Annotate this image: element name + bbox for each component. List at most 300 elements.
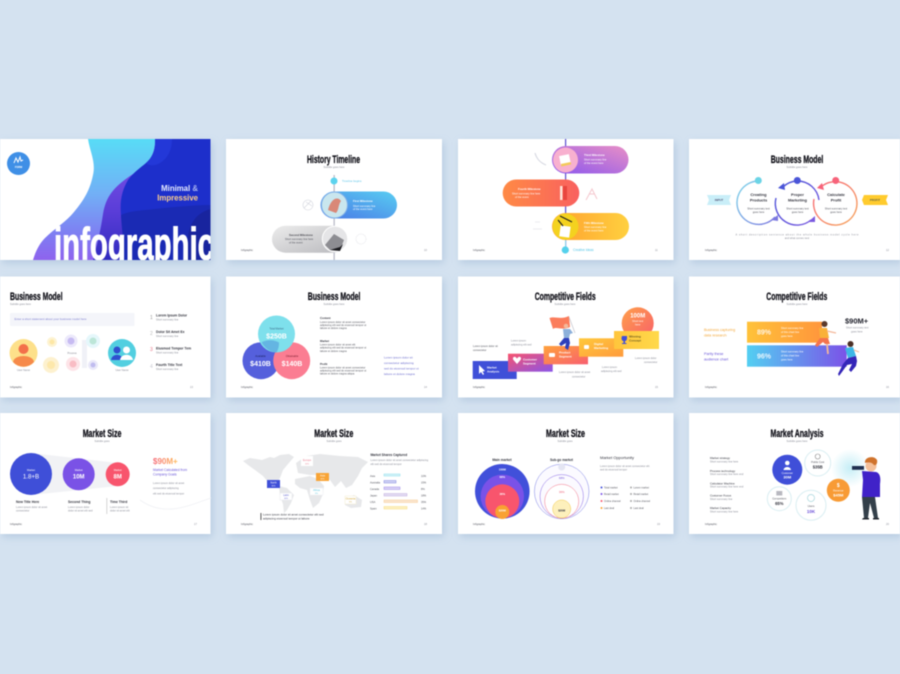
list: items: 4	[150, 364, 153, 370]
venn diagram: Total Market	[269, 326, 284, 330]
circle: 100M: Short text	[632, 319, 644, 323]
coral pill	[503, 180, 579, 206]
list: Calculator Machine	[710, 482, 735, 486]
map pin: blue	[267, 480, 280, 488]
coral pill: Short summary line here	[512, 192, 541, 196]
icon: user yellow	[10, 339, 38, 367]
bar chart: shares: 15%	[421, 480, 427, 484]
yellow pill: Fifth Milestone	[584, 221, 604, 225]
venn diagram: $140B	[282, 361, 302, 368]
coral pill: of the event	[515, 195, 529, 199]
text block: two: Market	[320, 339, 329, 343]
banner: Enter a short statement about your business model here	[14, 317, 87, 321]
list: items: 1	[150, 315, 153, 321]
step: four: Marketing	[594, 346, 608, 350]
text block: three: labore et dolore magna aliqua	[320, 372, 355, 376]
cycle: calculate profit: Calculate	[827, 192, 846, 197]
bar: 89%: goes here	[781, 334, 793, 338]
slide: competitive fields bars	[689, 276, 900, 398]
icon: phone sketch	[535, 153, 546, 165]
nested chart: main market: 68%	[499, 475, 506, 479]
caption: and what comes next	[785, 236, 810, 240]
map pin: blue: 30%	[271, 486, 276, 488]
nested chart: outline market: 36%	[559, 490, 565, 494]
grey pill: of the event	[289, 240, 303, 244]
input ribbon	[707, 195, 731, 205]
bar: 96%	[747, 345, 847, 367]
list: Process technology	[710, 469, 736, 473]
nested chart: main market: $20M	[499, 508, 506, 512]
map pin: pink: 10%	[305, 464, 309, 466]
labels around steps: Lorem ipsum	[511, 338, 526, 342]
bar chart: shares: USA	[370, 500, 376, 504]
subtitle: Subtitle goes here	[10, 302, 31, 306]
subtitle: Subtitle goes here	[787, 302, 808, 306]
cover heading: Impressive	[157, 194, 199, 202]
nested chart: main market: 100M	[499, 468, 506, 472]
legend	[600, 486, 651, 510]
market share heading: Lorem ipsum dolor sit amet consectetur adipiscing	[370, 458, 429, 462]
title: Market Size	[83, 428, 121, 440]
yellow pill	[552, 213, 629, 240]
footer brand: Infigraphic	[241, 385, 254, 389]
bubble: competitors: Competitors	[772, 496, 787, 500]
list: Short summary line here	[710, 510, 739, 514]
page number: 18	[424, 522, 427, 526]
bubble: competitors: 65%	[775, 501, 784, 506]
bar: 89%: 89%	[757, 330, 772, 336]
profit ribbon	[862, 195, 888, 205]
bubble: users: 10K	[807, 509, 816, 514]
column one: New Title Here	[16, 500, 39, 504]
opportunity text: Lorem ipsum dolor sit amet consectetur elit	[600, 464, 650, 468]
bar chart: shares: Asia	[370, 474, 376, 478]
value: $90M+: $90M+	[845, 316, 869, 326]
map pin: yellow: Oceania	[346, 496, 356, 500]
slide: market size map	[226, 413, 442, 534]
text block: one: Content	[320, 316, 331, 320]
bar chart: shares: Australia	[370, 480, 381, 484]
title: Business Model	[10, 291, 62, 303]
icon: faint mark	[533, 222, 542, 229]
page number: 16	[886, 385, 889, 389]
column two	[68, 500, 93, 512]
slide: history timeline	[226, 139, 442, 260]
column three: Lorem ipsum sit	[110, 505, 129, 509]
bar: 89%: of this chart line	[781, 330, 800, 334]
title: Business Model	[771, 154, 823, 166]
bar: 96%: goes here	[781, 358, 793, 362]
icon: outline sketch	[303, 200, 313, 210]
circle: 8M	[106, 462, 130, 486]
circle: 1.8+B: 1.8+B	[23, 474, 39, 480]
funnel shading	[31, 453, 118, 495]
flow nodes: Process	[67, 351, 77, 355]
text block: two: adipiscing elit sed do eiusmod tempor ut	[320, 346, 367, 350]
legend: Lorem market	[634, 486, 649, 490]
caption: users: User Name	[115, 368, 129, 372]
grey pill: Second Milestone	[289, 233, 313, 237]
list: items: Short summary line	[156, 350, 179, 354]
title: Competitive Fields	[535, 291, 596, 303]
value description: Market Calculated from	[153, 468, 187, 472]
left label: violet: audience chart	[704, 358, 728, 362]
list: items	[150, 314, 191, 371]
text block: three: adipiscing elit sed do eiusmod tempor ut	[320, 368, 367, 372]
text block: one: labore et dolore magna	[320, 326, 347, 330]
slide: timeline continued	[458, 139, 674, 260]
bar: 96%: 96%	[757, 354, 772, 360]
venn diagram: $250B	[266, 334, 287, 340]
market share heading	[370, 453, 429, 466]
legend: Online channel	[604, 500, 621, 503]
cycle: proper marketing: Marketing	[788, 198, 807, 202]
coral pill: Fourth Milestone	[518, 187, 541, 191]
cycle: creating products: Short summary text	[747, 206, 770, 210]
legend: Last deal	[604, 507, 615, 510]
bar chart: shares: 10%	[421, 474, 427, 478]
side note: consectetur adipiscing	[384, 361, 414, 365]
banner	[10, 313, 134, 326]
cycle: calculate profit: goes here	[830, 210, 842, 214]
title: Market Size	[314, 428, 353, 440]
map pin: blue: North	[270, 480, 277, 484]
bar chart: shares	[370, 474, 427, 510]
purple pill: Short summary line	[584, 158, 607, 162]
bar chart: shares: Spain	[370, 506, 377, 510]
step: three: Segment	[559, 354, 572, 358]
page number: 10	[424, 248, 427, 252]
end marker: Creative Ideas	[573, 248, 594, 252]
map note	[260, 512, 324, 520]
value description: consectetur adipiscing	[153, 486, 179, 490]
left label: orange	[704, 328, 735, 338]
end marker	[562, 240, 594, 254]
value: $90M+: goes here	[851, 330, 863, 334]
column one: Lorem ipsum dolor sit amet	[16, 505, 48, 509]
legend: Total market	[604, 486, 618, 490]
slide: business model cycle	[689, 139, 900, 260]
text block: one: Lorem ipsum dolor sit amet consectetur	[320, 320, 366, 324]
map pin: violet: Latin	[283, 493, 289, 497]
start marker: Timeline begins	[342, 179, 362, 183]
list: items: Dolor Sit Amet Ex	[156, 330, 185, 334]
subtitle: Subtitle goes here	[555, 302, 576, 306]
slide: venn market	[226, 276, 442, 398]
timeline axis	[334, 175, 335, 260]
world map	[243, 454, 368, 513]
nested chart: outline market: Sub-go market	[550, 458, 574, 462]
slide: business model flow	[0, 276, 210, 398]
list: items: Fourth Title Text	[156, 363, 183, 367]
icon: logo badge	[7, 152, 30, 175]
cycle: proper marketing: goes here	[792, 210, 804, 214]
title: Business Model	[308, 291, 360, 303]
icon: logo badge: FORM	[15, 166, 22, 169]
step: five	[614, 331, 659, 349]
person: runner	[838, 341, 859, 376]
bar chart: shares: 18%	[421, 494, 427, 498]
text block: three	[320, 362, 367, 376]
cycle: proper marketing: Short summary text	[786, 206, 809, 210]
list: items: 2	[150, 331, 153, 337]
bar: 96%: Short summary line	[781, 350, 804, 354]
circle: 100M: here	[635, 322, 641, 326]
cycle: creating products: goes here	[753, 210, 765, 214]
column two: Second Thing	[68, 500, 90, 504]
slide: infographic cover	[0, 139, 214, 270]
curve decoration	[140, 498, 211, 509]
list: items: Short summary line	[156, 318, 179, 322]
bubble: orange	[827, 479, 850, 502]
subtitle: Subtitle goes	[558, 439, 573, 443]
value: $90M+: Short summary text	[846, 326, 869, 330]
cycle: creating products	[737, 177, 778, 224]
value description	[153, 468, 187, 496]
value description: elit sed do eiusmod tempor	[153, 492, 184, 496]
opportunity text	[600, 464, 650, 472]
map pin: yellow: 5%	[349, 502, 352, 504]
list: Short summary line here	[710, 460, 739, 464]
column two: Lorem ipsum dolor	[68, 505, 90, 509]
blue pill	[320, 192, 397, 218]
nested chart: outline market: $20M	[558, 508, 566, 512]
cover heading: Minimal &	[161, 184, 198, 193]
list: items: Eiusmod Tempor Tem	[156, 346, 191, 350]
nested chart: main market: Main market	[492, 458, 513, 462]
bubble: public cost: $35B	[813, 464, 823, 470]
slide: competitive fields stairs	[458, 276, 674, 398]
list: items: Short summary line	[156, 334, 179, 338]
subtitle: Subtitle goes	[94, 439, 110, 443]
bar chart: shares: 14%	[421, 506, 427, 510]
grey pill	[272, 226, 348, 253]
circle: 10M: 10M	[73, 474, 85, 480]
list: Short summary line here end	[710, 484, 744, 488]
cycle: creating products: Products	[750, 198, 768, 202]
bubble: competitors	[767, 487, 791, 511]
page number: 17	[194, 522, 197, 526]
subtitle: Subtitle goes here	[787, 439, 808, 443]
map note: Lorem ipsum dolor sit amet consectetur elit sed	[263, 512, 324, 516]
flag person	[550, 316, 575, 350]
bar chart: shares: Canada	[370, 487, 380, 491]
left label: violet	[704, 352, 728, 362]
bubble: indigo	[772, 455, 802, 485]
nested chart: outline market: 68%	[559, 476, 565, 480]
circle: 100M	[622, 307, 654, 339]
page number: 19	[657, 522, 660, 526]
circle: 100M: 100M	[630, 314, 645, 320]
map pin: yellow	[345, 496, 356, 504]
value: $90M+: $90M+	[153, 457, 178, 466]
step: four	[579, 338, 623, 357]
subtitle: Subtitle goes here	[324, 165, 345, 169]
step: one: Market	[487, 366, 497, 370]
footer brand: Infigraphic	[473, 522, 486, 526]
start marker	[330, 178, 362, 184]
page number: 11	[655, 248, 658, 252]
bubble: orange: Revenue	[833, 488, 844, 492]
labels around steps: Lorem ipsum dolor sit	[473, 344, 498, 348]
map pin: orange	[316, 473, 329, 481]
list: Short summary line	[710, 497, 733, 501]
venn diagram	[242, 316, 310, 379]
subtitle: Subtitle goes	[326, 439, 342, 443]
market share heading: elit sed do eiusmod tempor	[370, 462, 402, 466]
list: Market strategy	[710, 456, 730, 460]
column three: dolor sit amet elit	[110, 508, 130, 512]
column three	[106, 498, 130, 514]
page number: 20	[886, 522, 889, 526]
yellow pill: Short summary line	[584, 225, 607, 229]
map note: adipiscing eiusmod tempor ut labore	[263, 516, 310, 520]
text block: two: Lorem ipsum dolor sit amet elit	[320, 342, 356, 346]
circle: 10M	[63, 458, 95, 490]
grey pill: Short summary line here	[285, 237, 314, 241]
circle: 1.8+B	[10, 453, 52, 495]
icon: compass sketch	[586, 189, 597, 200]
opportunity heading: Market Opportunity	[600, 455, 634, 460]
labels around steps: Lorem ipsum	[602, 365, 617, 369]
circle: 8M: Market	[114, 468, 122, 472]
title: Competitive Fields	[766, 291, 827, 303]
map pin: cyan: Africa	[313, 488, 320, 492]
labels around steps: consectetur	[572, 374, 586, 378]
labels around steps: Lorem ipsum dolor sit amet	[559, 370, 591, 374]
step: four: Digital	[594, 342, 603, 346]
venn diagram: Available	[255, 354, 266, 358]
map pin: pink: Europe	[303, 458, 312, 462]
page number: 15	[655, 385, 658, 389]
value description: Company Goals	[153, 472, 177, 476]
cover heading	[157, 184, 199, 202]
bubble: indigo: 30M	[783, 474, 792, 480]
step: two: Customer	[523, 358, 538, 362]
icon: users teal	[108, 339, 136, 367]
legend: Online channel	[634, 500, 651, 503]
step: one	[473, 361, 517, 379]
bubble: orange: $	[837, 483, 840, 489]
list: items: 3	[150, 347, 153, 353]
text block: two	[320, 339, 367, 353]
bubble: users: Users	[808, 504, 815, 508]
title: Market Size	[546, 428, 585, 440]
page number: 12	[886, 248, 889, 252]
title: History Timeline	[307, 154, 360, 166]
labels around steps: consectetur	[473, 348, 487, 352]
blue pill: of the event here	[353, 207, 373, 211]
circle: 1.8+B: Market	[27, 468, 35, 472]
footer brand: Infigraphic	[705, 522, 718, 526]
blue pill: First Milestone	[353, 199, 373, 203]
profit ribbon: PROFIT	[870, 198, 880, 202]
map pin: violet	[280, 493, 292, 500]
legend: Retail market	[634, 493, 649, 496]
bar chart: shares: 35%	[421, 500, 427, 504]
purple pill	[552, 146, 628, 174]
column three: Time Third	[110, 500, 127, 504]
venn diagram: Obtainable	[286, 354, 299, 358]
map pin: orange: 40%	[320, 478, 325, 480]
map pin: violet: 10%	[284, 498, 288, 500]
labels around steps: consectetur	[644, 360, 658, 364]
footer brand: Infigraphic	[10, 385, 23, 389]
cycle: calculate profit: Profit	[831, 198, 842, 202]
subtitle: Subtitle goes here	[787, 165, 808, 169]
person with telescope	[852, 457, 880, 520]
list: items: Short summary line	[156, 367, 179, 371]
halo behind person	[831, 449, 869, 487]
cycle: calculate profit: Short summary text	[825, 206, 848, 210]
footer brand: Infigraphic	[473, 385, 486, 389]
step: five: Winning	[629, 334, 641, 338]
bubble: public cost: Public Cost	[811, 460, 825, 464]
list: Short summary line here end	[710, 472, 744, 476]
market share heading: Market Shares Captured	[370, 453, 407, 457]
step: two: Segment	[523, 362, 536, 366]
slide: market size nested	[458, 413, 674, 534]
venn diagram: $410B	[250, 361, 271, 368]
side note: Lorem ipsum dolor sit	[384, 356, 413, 360]
bar: 96%: of this chart line	[781, 354, 800, 358]
opportunity text: sed do eiusmod tempor	[600, 468, 627, 472]
step: two	[508, 354, 553, 372]
legend: Last deal	[634, 507, 644, 510]
text block: three: Profit	[320, 362, 327, 366]
person: woman	[815, 321, 836, 354]
map pin: orange: Asia	[320, 474, 326, 478]
nested chart: main market: 36%	[499, 492, 506, 496]
left label: orange: data research	[704, 334, 727, 338]
bubble: public cost	[805, 450, 831, 476]
side note: labore et dolore magna	[384, 372, 415, 376]
slide: market size circles	[0, 413, 211, 534]
caption	[736, 232, 859, 240]
bubble: orange: $45M	[833, 492, 844, 498]
labels around steps	[473, 338, 658, 378]
nested chart: main market	[475, 458, 530, 519]
column one: consectetur	[16, 508, 30, 512]
subtitle: Subtitle goes here	[324, 302, 345, 306]
legend: Retail market	[604, 493, 619, 496]
slide: market analysis	[689, 413, 900, 534]
list	[710, 456, 744, 514]
footer brand: Infigraphic	[705, 385, 718, 389]
cycle: proper marketing: Proper	[791, 192, 804, 197]
circle: 8M: 8M	[114, 474, 122, 480]
value description: Lorem ipsum dolor sit amet	[153, 481, 185, 485]
value: $90M+	[845, 316, 869, 334]
footer brand: Infigraphic	[241, 248, 254, 252]
caption: user: User Name	[17, 368, 31, 372]
labels around steps: adipiscing elit sed	[601, 369, 622, 373]
bar: 89%	[747, 322, 822, 343]
left label: orange: Business capturing	[704, 328, 735, 332]
flow nodes	[43, 334, 100, 373]
circle: 10M: Market	[75, 468, 83, 472]
blue pill: Short summary line	[353, 204, 376, 208]
bar chart: shares: Japan	[370, 494, 378, 498]
title: Market Analysis	[770, 428, 824, 440]
list: Customer Focus	[710, 494, 732, 498]
labels around steps: adipiscing elit sed	[511, 342, 532, 346]
purple pill: of the event here	[584, 161, 604, 165]
column two: dolor sit amet elit sed	[68, 508, 93, 512]
step: three	[544, 346, 588, 364]
bar chart: shares: 8%	[421, 487, 425, 491]
step: three: Product	[559, 350, 570, 354]
